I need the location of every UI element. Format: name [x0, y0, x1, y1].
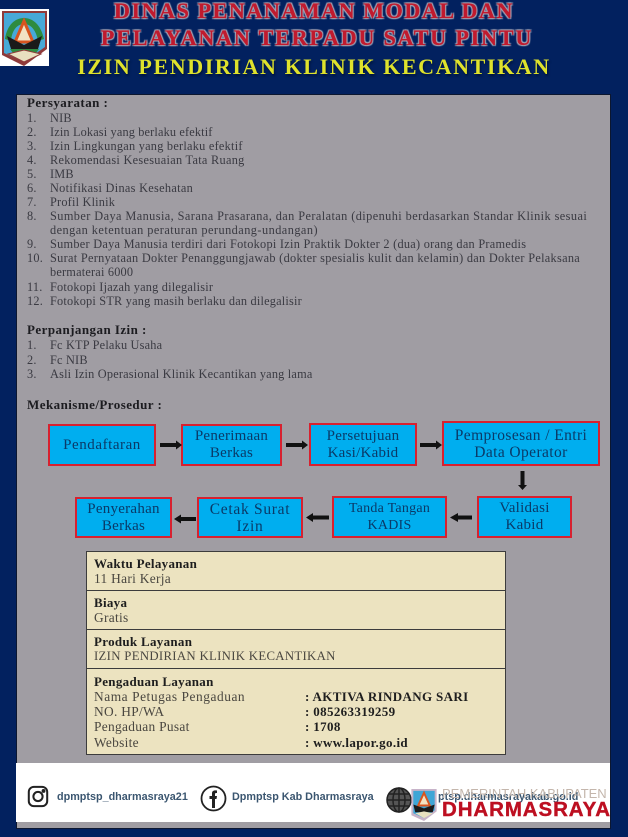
arrow: step 7 to 8: [174, 514, 196, 524]
step: Cetak Surat Izin: [197, 497, 303, 538]
arrow: step 3 to 4: [420, 440, 442, 450]
government label: PEMERINTAH KABUPATEN: [442, 786, 607, 801]
flowchart: procedure: [48, 421, 600, 538]
step: Pemprosesan: Data Operator: [474, 444, 568, 460]
heading: Mekanisme/Prosedur: Mekanisme/Prosedur :: [27, 397, 162, 412]
requirement list: NIB: [50, 111, 72, 125]
requirement list: Notifikasi Dinas Kesehatan: [50, 181, 193, 195]
icon: regency crest small: [411, 789, 437, 821]
step: Pendaftaran: Pendaftaran: [63, 436, 141, 452]
Dharmasraya wordmark: DHARMASRAYA: [442, 798, 611, 821]
facebook page: Dpmptsp Kab Dharmasraya: [232, 791, 374, 803]
step: Persetujuan Kasi/Kabid: Kasi/Kabid: [328, 444, 398, 460]
requirement list: Profil Klinik: [50, 195, 115, 209]
extension list: Fc NIB: [50, 353, 88, 367]
arrow: step 1 to 2: [160, 440, 182, 450]
heading: Perpanjangan Izin: Perpanjangan Izin :: [27, 322, 147, 337]
row: complaints: Pengaduan Layanan: [94, 674, 214, 689]
row: complaints: : www.lapor.go.id: [305, 735, 408, 750]
step: Penyerahan Berkas: [75, 497, 172, 538]
row: complaints: Pengaduan Pusat: [94, 719, 190, 734]
arrow: step 2 to 3: [286, 440, 308, 450]
extension list: Fc KTP Pelaku Usaha: [50, 338, 162, 352]
requirement list: dengan ketentuan peraturan perundang-undangan): [50, 223, 318, 237]
requirement list: 5.: [27, 167, 37, 181]
website url: ptsp.dharmasrayakab.go.id: [438, 791, 578, 803]
step: Cetak Surat Izin: Izin: [237, 518, 263, 534]
row: cost: Biaya: [94, 595, 127, 610]
requirement list: 2.: [27, 125, 37, 139]
step: Persetujuan Kasi/Kabid: Persetujuan: [327, 428, 399, 444]
arrow: step 4 to 5: [518, 471, 527, 490]
step: Validasi Kabid: Validasi: [499, 500, 550, 516]
panel: service information table: [86, 551, 506, 755]
requirement list: Izin Lokasi yang berlaku efektif: [50, 125, 213, 139]
step: Cetak Surat Izin: Cetak Surat: [210, 500, 290, 518]
step: Tanda Tangan KADIS: KADIS: [367, 518, 412, 533]
step: Tanda Tangan KADIS: Tanda Tangan: [349, 501, 430, 516]
row: complaints: : 1708: [305, 719, 341, 734]
row: complaints: Nama Petugas Pengaduan: [94, 689, 245, 704]
arrows between steps: [160, 440, 527, 524]
row: service time: 11 Hari Kerja: [94, 571, 171, 586]
panel: requirements: [27, 95, 587, 308]
requirement list: [27, 111, 587, 308]
row: cost: Gratis: [94, 610, 129, 625]
step: Pendaftaran: [48, 424, 156, 466]
icon: facebook: [200, 786, 226, 812]
requirement list: Izin Lingkungan yang berlaku efektif: [50, 139, 243, 153]
requirement list: IMB: [50, 167, 74, 181]
requirement list: Surat Pernyataan Dokter Penanggungjawab (dokter spesialis kulit dan kelamin) dan Dokter Pelaksana: [50, 251, 580, 265]
requirement list: 8.: [27, 209, 37, 223]
heading: Persyaratan: Persyaratan :: [27, 95, 108, 110]
row: cost: [86, 591, 506, 630]
requirement list: 3.: [27, 139, 37, 153]
arrow: step 5 to 6: [450, 513, 472, 522]
step: Penyerahan Berkas: Berkas: [102, 518, 145, 534]
requirement list: 1.: [27, 111, 37, 125]
row: complaints: NO. HP/WA: [94, 704, 164, 719]
step: Persetujuan Kasi/Kabid: [309, 423, 417, 466]
subtitle: IZIN PENDIRIAN KLINIK KECANTIKAN: [77, 54, 551, 79]
footer: social media band: [16, 763, 610, 822]
extension list: 1.: [27, 338, 37, 352]
arrow: step 6 to 7: [306, 513, 329, 522]
requirement list: 12.: [27, 294, 43, 308]
logo: regency crest: [0, 9, 49, 66]
row: complaints: Website: [94, 735, 139, 750]
icon: instagram: [28, 786, 48, 808]
extension list: 2.: [27, 353, 37, 367]
requirement list: 4.: [27, 153, 37, 167]
instagram handle: dpmptsp_dharmasraya21: [57, 791, 188, 803]
header title: [77, 0, 551, 79]
requirement list: Sumber Daya Manusia, Sarana Prasarana, dan Peralatan (dipenuhi berdasarkan Standar Klinik sesuai: [50, 209, 587, 223]
step: Pemprosesan: [442, 421, 600, 466]
row: complaints: : 085263319259: [305, 704, 395, 719]
requirement list: Fotokopi Ijazah yang dilegalisir: [50, 280, 213, 294]
extension list: Asli Izin Operasional Klinik Kecantikan yang lama: [50, 367, 312, 381]
requirement list: 9.: [27, 237, 37, 251]
row: complaints: [94, 674, 469, 750]
step: Penerimaan Berkas: [181, 424, 282, 466]
row: service product: Produk Layanan: [94, 634, 192, 649]
step: Penerimaan Berkas: Berkas: [210, 445, 253, 461]
requirement list: bermaterai 6000: [50, 265, 133, 279]
extension list: 3.: [27, 367, 37, 381]
step: Validasi Kabid: [477, 496, 572, 538]
step: Validasi Kabid: Kabid: [506, 517, 543, 533]
requirement list: 7.: [27, 195, 37, 209]
requirement list: 10.: [27, 251, 43, 265]
requirement list: 11.: [27, 280, 43, 294]
requirement list: 6.: [27, 181, 37, 195]
step: Tanda Tangan KADIS: [332, 496, 447, 538]
row: service product: IZIN PENDIRIAN KLINIK KECANTIKAN: [94, 649, 336, 663]
row: complaints: : AKTIVA RINDANG SARI: [305, 689, 469, 704]
row: service product: [86, 630, 506, 669]
extension list: [27, 338, 312, 381]
icon: website globe: [386, 787, 412, 813]
requirement list: Sumber Daya Manusia terdiri dari Fotokopi Izin Praktik Dokter 2 (dua) orang dan Pramedis: [50, 237, 526, 251]
panel: permit extension: [27, 322, 312, 381]
title line 2: PELAYANAN TERPADU SATU PINTU: [101, 25, 533, 50]
row: service time: Waktu Pelayanan: [94, 556, 197, 571]
step: Penerimaan Berkas: Penerimaan: [195, 428, 268, 444]
step: Pemprosesan: Pemprosesan / Entri: [455, 426, 587, 444]
requirement list: Rekomendasi Kesesuaian Tata Ruang: [50, 153, 245, 167]
step: Penyerahan Berkas: Penyerahan: [87, 500, 160, 516]
row: service time: [86, 551, 506, 591]
requirement list: Fotokopi STR yang masih berlaku dan dilegalisir: [50, 294, 302, 308]
